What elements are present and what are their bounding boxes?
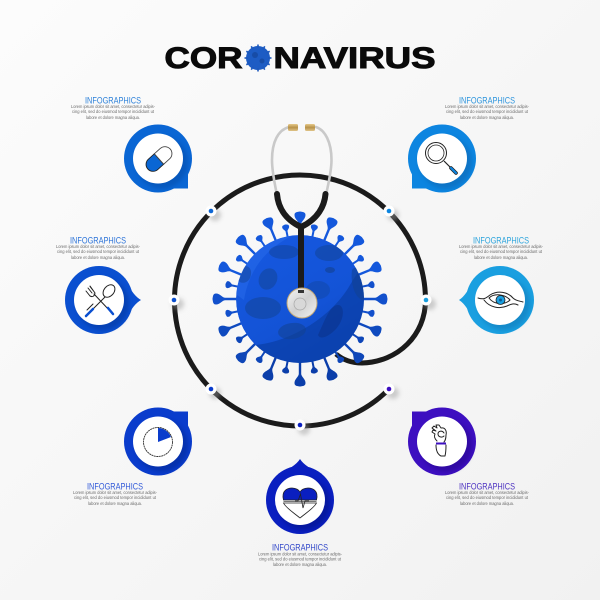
ear tubes xyxy=(272,127,332,195)
virus body xyxy=(236,235,364,363)
heading: INFOGRAPHICS xyxy=(459,482,515,492)
bubble xyxy=(408,408,476,476)
heading: INFOGRAPHICS xyxy=(70,236,126,246)
bubble xyxy=(408,124,476,192)
description: cing elit, sed do eiusmod tempor incididunt ut xyxy=(57,249,140,254)
chest piece xyxy=(286,288,318,318)
icon: pill xyxy=(143,144,175,174)
description xyxy=(71,104,156,120)
description: Lorem ipsum dolor sit amet, consectetur adipis- xyxy=(258,552,343,556)
title xyxy=(164,42,436,75)
description: Lorem ipsum dolor sit amet, consectetur adipis- xyxy=(459,244,544,249)
bubble xyxy=(459,266,534,334)
panel: hand xyxy=(408,408,530,506)
panel: clock xyxy=(73,408,192,506)
description xyxy=(56,244,141,260)
description xyxy=(73,490,158,506)
description: labore et dolore magna aliqua. xyxy=(86,115,140,120)
icon: OK hand xyxy=(432,425,446,456)
connector nodes xyxy=(168,206,436,435)
panel: pill xyxy=(71,96,192,192)
bubble xyxy=(266,459,334,534)
description xyxy=(445,104,530,120)
panel: fork and spoon xyxy=(56,236,141,334)
black Y tube xyxy=(277,194,326,227)
icon: clock xyxy=(144,428,172,456)
ear tips xyxy=(288,124,315,131)
description: labore et dolore magna aliqua. xyxy=(460,501,514,506)
heading: INFOGRAPHICS xyxy=(85,96,141,106)
description: cing elit, sed do eiusmod tempor incididunt ut xyxy=(259,556,342,562)
description: cing elit, sed do eiusmod tempor incididunt ut xyxy=(446,109,529,114)
description: Lorem ipsum dolor sit amet, consectetur adipis- xyxy=(445,490,530,495)
title text: NAVIRUS: NAVIRUS xyxy=(274,42,436,75)
bubble xyxy=(124,124,192,192)
description xyxy=(459,244,544,260)
description xyxy=(258,552,343,567)
heading: INFOGRAPHICS xyxy=(87,482,143,492)
stethoscope tube ring xyxy=(175,175,426,426)
description: Lorem ipsum dolor sit amet, consectetur adipis- xyxy=(71,104,156,109)
title text: COR: COR xyxy=(164,42,243,75)
panel: magnifier xyxy=(408,96,530,192)
description: cing elit, sed do eiusmod tempor incididunt ut xyxy=(446,495,529,500)
heading: INFOGRAPHICS xyxy=(459,96,515,106)
description: Lorem ipsum dolor sit amet, consectetur adipis- xyxy=(56,244,141,249)
icon: magnifier xyxy=(426,142,456,173)
heading: INFOGRAPHICS xyxy=(473,236,529,246)
description: Lorem ipsum dolor sit amet, consectetur adipis- xyxy=(73,490,158,495)
description: labore et dolore magna aliqua. xyxy=(71,255,125,260)
description: cing elit, sed do eiusmod tempor incididunt ut xyxy=(460,249,543,254)
description: labore et dolore magna aliqua. xyxy=(460,115,514,120)
description: Lorem ipsum dolor sit amet, consectetur adipis- xyxy=(445,104,530,109)
description: labore et dolore magna aliqua. xyxy=(474,255,528,260)
stem xyxy=(298,224,304,293)
stethoscope xyxy=(272,124,332,318)
virus spikes xyxy=(212,212,388,386)
icon: heart xyxy=(283,488,317,518)
description xyxy=(445,490,530,506)
virus illustration xyxy=(212,212,388,386)
description: cing elit, sed do eiusmod tempor incididunt ut xyxy=(72,109,155,114)
description: labore et dolore magna aliqua. xyxy=(88,501,142,506)
icon: eye xyxy=(478,292,523,308)
icon: fork and spoon xyxy=(86,282,117,316)
icon: title virus xyxy=(244,44,272,72)
description: labore et dolore magna aliqua. xyxy=(273,562,327,567)
heading: INFOGRAPHICS xyxy=(272,542,328,552)
panel: heart xyxy=(258,459,343,567)
bubble xyxy=(65,266,141,334)
panel: eye xyxy=(459,236,544,334)
bubble xyxy=(124,408,192,476)
description: cing elit, sed do eiusmod tempor incididunt ut xyxy=(74,495,157,500)
